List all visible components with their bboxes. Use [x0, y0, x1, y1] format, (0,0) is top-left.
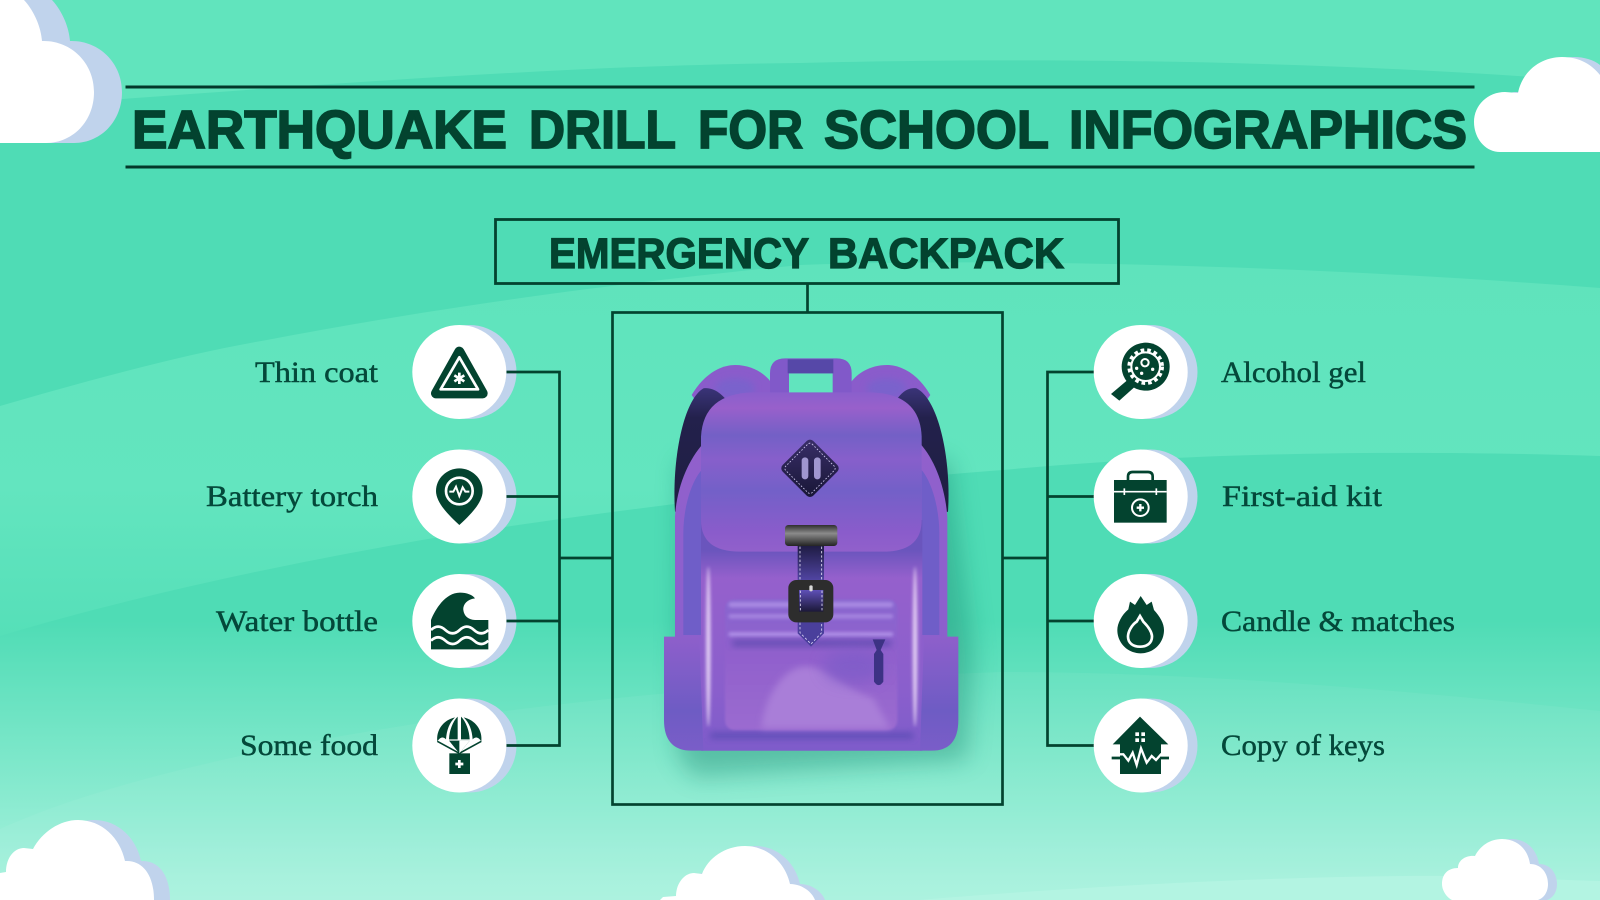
main body	[675, 443, 947, 751]
right icons	[1111, 343, 1170, 774]
title	[126, 87, 1474, 167]
cloud: top right	[1474, 57, 1600, 152]
side panels	[683, 470, 939, 635]
title: SCHOOL	[824, 100, 1049, 160]
shoulder straps	[674, 388, 949, 520]
base shading	[710, 733, 913, 739]
zipper pull	[873, 639, 885, 685]
carry handle	[770, 358, 852, 397]
heading: emergency backpack: EMERGENCY	[549, 230, 809, 278]
icon: house with crack	[1112, 717, 1169, 774]
right labels: Alcohol gel	[1221, 356, 1366, 389]
cloud: top left	[0, 0, 122, 143]
cloud: bottom right	[1442, 839, 1557, 900]
left labels: Water bottle	[216, 605, 378, 638]
heading: emergency backpack: BACKPACK	[828, 230, 1064, 278]
icon: tidal wave	[431, 593, 488, 649]
left labels	[206, 356, 379, 762]
icon: map pin with pulse	[436, 468, 483, 525]
cloud: bottom centre	[660, 846, 825, 900]
connector lines	[506, 284, 1094, 746]
icon: parachute medical drop	[437, 717, 481, 774]
left icons	[431, 352, 488, 774]
side pockets	[664, 637, 958, 751]
left labels: Battery torch	[206, 480, 378, 513]
left icon circles	[412, 325, 516, 792]
icon: first-aid kit	[1114, 472, 1167, 523]
title: FOR	[698, 100, 803, 160]
shoulder tops	[692, 365, 930, 407]
right labels	[1221, 356, 1455, 762]
icon: magnifier with virus	[1111, 343, 1170, 401]
title: INFOGRAPHICS	[1069, 100, 1467, 160]
left labels: Some food	[240, 729, 378, 762]
cloud: bottom left	[0, 820, 170, 900]
heading: emergency backpack	[496, 220, 1118, 284]
icon: flame drop	[1117, 596, 1164, 653]
left labels: Thin coat	[255, 356, 379, 389]
backpack shadow	[677, 460, 973, 777]
right icon circles	[1094, 325, 1198, 792]
diamond patch	[779, 438, 841, 499]
top flap	[701, 392, 922, 552]
backpack frame	[612, 312, 1002, 804]
right labels: Candle & matches	[1221, 605, 1455, 638]
seam highlights	[706, 567, 917, 727]
icon: warning triangle	[436, 352, 483, 393]
title: DRILL	[529, 100, 676, 160]
right labels: Copy of keys	[1221, 729, 1385, 762]
front pocket	[725, 599, 897, 730]
backpack illustration	[664, 358, 973, 777]
strap and buckles	[785, 525, 837, 647]
right labels: First-aid kit	[1222, 480, 1383, 513]
title: EARTHQUAKE	[132, 100, 507, 160]
centre panel	[701, 520, 922, 751]
